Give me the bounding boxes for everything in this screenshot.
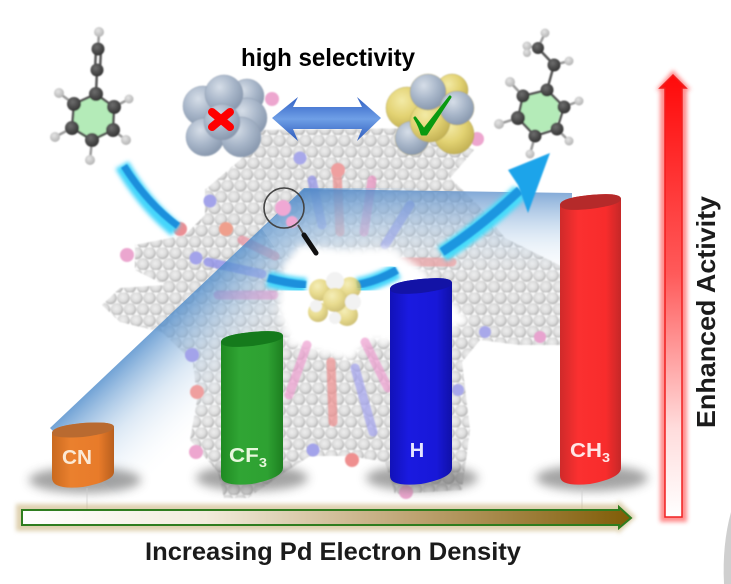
label: increasing Pd electron density: Increasing Pd Electron Density <box>145 538 521 566</box>
top panel edge <box>262 189 572 285</box>
bar: H: H <box>410 440 424 462</box>
porous framework of grey beads <box>102 128 600 498</box>
alloy sphere cluster <box>386 74 474 155</box>
bar: CH3 <box>536 194 648 510</box>
benzene ring <box>520 92 560 132</box>
arrow: enhanced activity <box>656 70 691 522</box>
curved cyan reaction arrow <box>122 153 550 286</box>
bonds <box>499 33 579 154</box>
hydrogen atoms <box>494 28 584 158</box>
outgoing arrow with head <box>442 153 550 254</box>
reactant molecule: phenylacetylene <box>50 27 134 165</box>
framework body <box>102 128 600 498</box>
lower linker stripes and coloured end beads <box>120 92 546 499</box>
incoming arrow segment <box>122 165 178 230</box>
upper and left linker stripes <box>208 172 452 295</box>
grey metal cluster with red cross <box>183 75 267 157</box>
lower stripes <box>289 342 388 432</box>
decorative grey arc at bottom-right corner <box>724 512 731 584</box>
bar: H <box>366 278 478 491</box>
coloured linker end beads <box>120 92 546 499</box>
bar: CH3: 3 <box>602 450 610 465</box>
bar: CH3: CH <box>570 440 599 462</box>
grey sphere cluster <box>183 75 267 157</box>
green check mark <box>415 97 450 134</box>
hydrogen atoms <box>50 27 134 165</box>
bar: CF3: CF <box>229 445 256 467</box>
heading: high selectivity: high selectivity <box>241 44 415 72</box>
bar: CN: CN <box>62 447 92 469</box>
diagonal panel edge <box>50 188 420 500</box>
bar: CN <box>29 422 141 510</box>
arrow: increasing electron density <box>16 500 636 534</box>
label: enhanced activity: Enhanced Activity <box>691 195 721 428</box>
red cross mark <box>212 112 230 127</box>
carbon atoms <box>511 42 570 142</box>
magnifying glass <box>264 188 316 253</box>
bar chart: activity per substituent <box>29 194 648 510</box>
product molecule: styrene <box>494 28 584 158</box>
bar: CF3 <box>196 331 308 491</box>
central white pore of the framework <box>278 245 470 360</box>
double-headed blue arrow <box>272 97 381 141</box>
gold-silver alloy cluster with green check <box>386 74 474 155</box>
carbon atoms <box>65 42 121 147</box>
bar: CF3: 3 <box>259 455 267 470</box>
small central gold nanocluster <box>308 272 361 326</box>
blue projection panel behind bars <box>50 188 572 500</box>
bonds <box>55 32 129 160</box>
benzene ring <box>72 97 114 139</box>
lower arrow segments <box>268 270 397 286</box>
